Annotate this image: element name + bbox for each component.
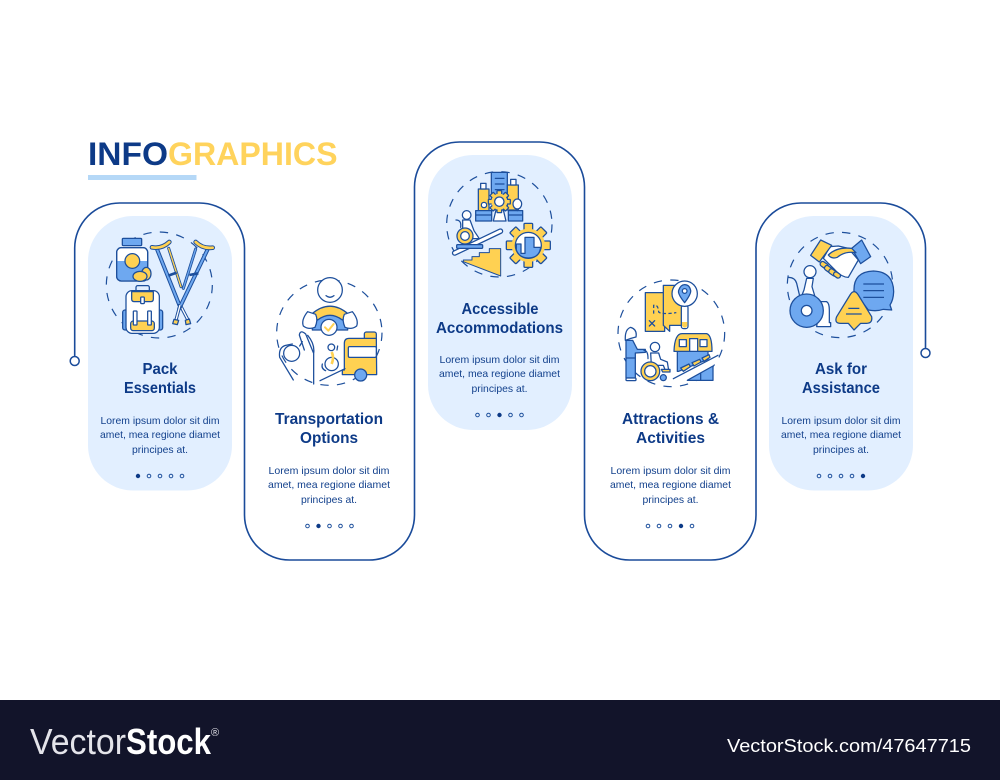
heading: Activities (636, 430, 705, 447)
heading: Assistance (802, 380, 880, 397)
pagination dots (136, 474, 184, 478)
body text: principes at. (472, 383, 528, 395)
title: INFO (88, 136, 168, 172)
heading: Ask for (815, 361, 867, 378)
body text: Lorem ipsum dolor sit dim (100, 415, 220, 427)
heading (275, 411, 383, 447)
body text: amet, mea regione diamet (268, 479, 390, 491)
icon: driver, hand gesture and accessible bus (277, 278, 382, 385)
body text (439, 354, 560, 395)
heading (124, 361, 196, 397)
body text: Lorem ipsum dolor sit dim (782, 415, 901, 427)
brand logo text: ® (211, 727, 219, 739)
heading: Attractions & (622, 411, 719, 428)
heading (436, 301, 563, 337)
icon: bottle, backpack and crutches (106, 232, 213, 338)
body text: Lorem ipsum dolor sit dim (268, 465, 390, 477)
body text (268, 465, 390, 506)
heading: Options (300, 430, 358, 447)
panel: transportation options (268, 278, 390, 528)
brand logo text: Vector (30, 721, 126, 762)
body text: Lorem ipsum dolor sit dim (440, 354, 560, 366)
body text: principes at. (301, 494, 357, 506)
body text: amet, mea regione diamet (610, 479, 731, 491)
icon: map, wheelchair visitor and ramped building (618, 280, 725, 387)
title (88, 136, 338, 172)
image id: VectorStock.com/47647715 (727, 736, 971, 756)
icon: handshake, wheelchair user and speech bubbles (787, 232, 894, 338)
body text (781, 415, 901, 456)
panel: accessible accommodations (428, 155, 572, 430)
footer bar (0, 700, 1000, 780)
panel: pack essentials (88, 216, 232, 490)
title: GRAPHICS (168, 136, 338, 172)
heading: Accessible (462, 301, 539, 318)
body text (100, 415, 220, 456)
panel: ask for assistance (769, 216, 913, 490)
body text: principes at. (642, 494, 698, 506)
title underline (88, 175, 196, 180)
body text: amet, mea regione diamet (100, 429, 220, 441)
pagination dots (476, 413, 523, 417)
body text: principes at. (813, 444, 869, 456)
pagination dots (646, 524, 694, 528)
body text (610, 465, 731, 506)
brand logo text (30, 721, 219, 762)
heading: Essentials (124, 380, 196, 397)
heading: Transportation (275, 411, 383, 428)
heading: Pack (142, 361, 178, 378)
heading (622, 411, 719, 447)
brand logo text: Stock (126, 721, 212, 762)
heading (802, 361, 880, 397)
heading: Accommodations (436, 320, 563, 337)
body text: amet, mea regione diamet (439, 368, 560, 380)
pagination dots (306, 524, 353, 528)
connecting outline (70, 142, 930, 560)
pagination dots (817, 474, 865, 478)
panel: attractions and activities (610, 280, 731, 528)
body text: amet, mea regione diamet (781, 429, 901, 441)
icon: city, stair lift and gear (447, 172, 552, 277)
body text: Lorem ipsum dolor sit dim (610, 465, 731, 477)
body text: principes at. (132, 444, 188, 456)
